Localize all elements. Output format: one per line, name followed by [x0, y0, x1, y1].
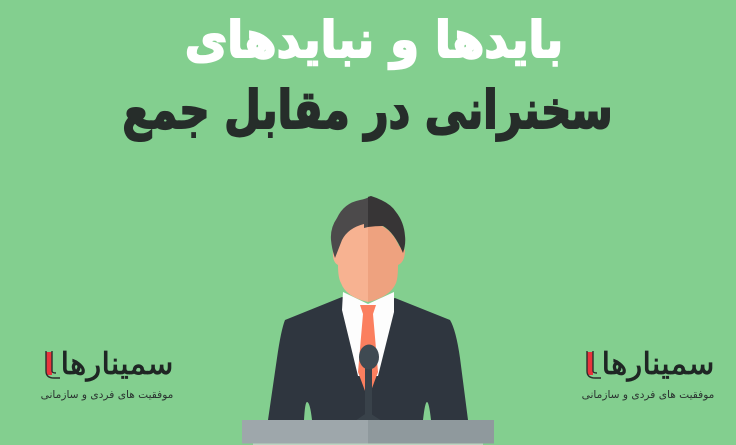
logo wordmark left: سمینارها — [61, 346, 173, 382]
speaker illustration — [242, 196, 494, 445]
shirt — [342, 292, 394, 376]
title line 2: سخنرانی در مقابل جمع — [122, 81, 613, 141]
face — [333, 222, 405, 302]
logo icon left — [46, 351, 60, 378]
tie — [358, 305, 378, 399]
logo icon right — [587, 351, 601, 378]
logo tagline right: موفقیت های فردی و سازمانی — [582, 389, 714, 401]
logo wordmark right: سمینارها — [602, 346, 714, 382]
logo left — [41, 346, 173, 401]
title line 1: بایدها و نبایدهای — [185, 11, 563, 69]
logo right — [582, 346, 714, 401]
microphone — [355, 344, 382, 421]
suit — [268, 297, 468, 420]
podium — [242, 420, 494, 445]
logo tagline left: موفقیت های فردی و سازمانی — [41, 389, 173, 401]
hair — [331, 196, 405, 258]
